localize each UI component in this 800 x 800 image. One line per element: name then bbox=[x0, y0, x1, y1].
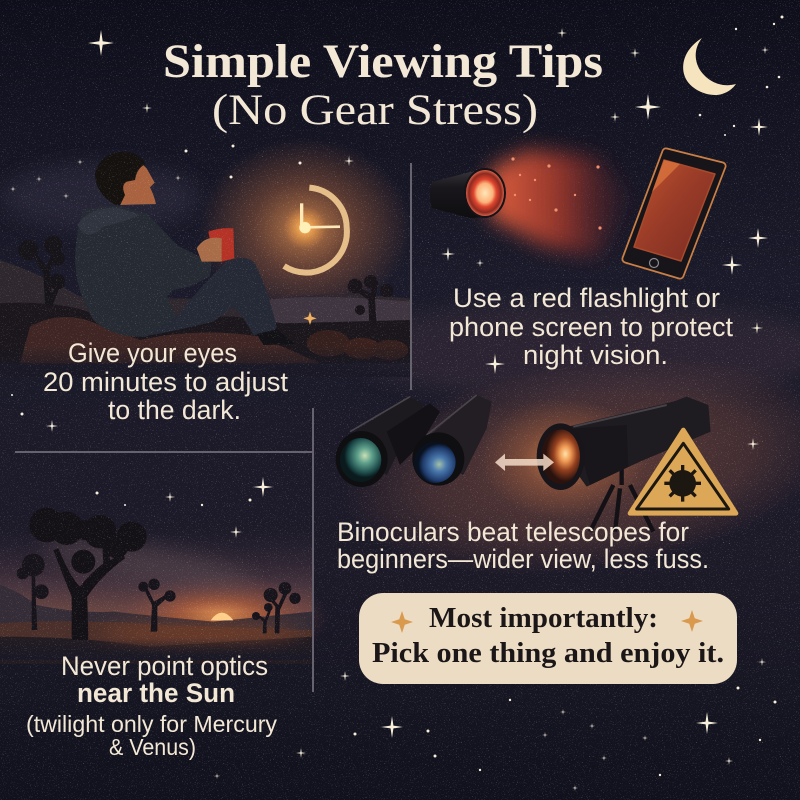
callout: Most importantly: bbox=[429, 603, 658, 634]
red beam bbox=[490, 150, 632, 257]
icon: tripod bbox=[590, 468, 653, 532]
icon: sun bbox=[211, 613, 233, 620]
caption bbox=[449, 283, 733, 370]
icon: sparkle left bbox=[391, 611, 413, 633]
caption: eyes: 20 minutes to adjust bbox=[43, 367, 288, 397]
caption bbox=[337, 517, 709, 574]
icon: joshua tree left bbox=[18, 236, 65, 305]
caption: Binoculars beat telescopes for bbox=[337, 517, 689, 547]
hand bbox=[197, 238, 222, 262]
icon: small trees right bbox=[252, 582, 301, 633]
panel: dark adaptation scene bbox=[0, 138, 412, 363]
icon: gold sparkle bbox=[303, 312, 317, 325]
title: (No Gear Stress) bbox=[212, 87, 538, 134]
icon: small tree left bbox=[17, 554, 49, 630]
caption: Use a red flashlight or bbox=[453, 283, 720, 313]
panel: optics bbox=[336, 395, 736, 574]
icon: crescent moon bbox=[683, 38, 736, 95]
icon: small tree centre bbox=[138, 579, 176, 632]
panel: sunset scene bbox=[0, 508, 330, 665]
icon: flashlight bbox=[430, 168, 506, 218]
icon: sparkle right bbox=[681, 610, 703, 632]
legs bbox=[143, 258, 277, 337]
panel: red light bbox=[430, 150, 733, 370]
caption: sun warning: & Venus) bbox=[109, 734, 196, 760]
icon: binoculars bbox=[336, 395, 492, 487]
icon: double arrow bbox=[495, 454, 554, 471]
divider lines bbox=[15, 163, 411, 692]
hair bbox=[95, 152, 145, 205]
icon: red mug bbox=[208, 228, 234, 262]
icon: large joshua tree bbox=[29, 508, 147, 640]
caption: sun warning: (twilight only for Mercury bbox=[26, 711, 277, 737]
icon: joshua tree right bbox=[348, 275, 393, 325]
telescope glow bbox=[480, 398, 647, 518]
title bbox=[163, 35, 603, 134]
person bbox=[75, 152, 295, 345]
caption: beginners—wider view, less fuss. bbox=[337, 544, 709, 574]
caption: night vision. bbox=[523, 340, 668, 370]
callout: Pick one thing and enjoy it. bbox=[372, 638, 724, 669]
hoodie bbox=[75, 206, 212, 337]
caption: eyes: to the dark. bbox=[108, 395, 241, 425]
caption: sun warning: near the Sun bbox=[77, 678, 235, 708]
icon: warning sign bbox=[630, 430, 736, 513]
icon: telescope bbox=[537, 397, 711, 490]
icon: clock glow bbox=[283, 188, 347, 273]
caption: eyes bbox=[43, 338, 288, 425]
caption: eyes: Give your eyes bbox=[68, 338, 237, 368]
beam sparkles bbox=[511, 157, 602, 230]
caption: sun warning: Never point optics bbox=[61, 651, 268, 681]
face bbox=[115, 162, 156, 205]
icon: phone bbox=[626, 152, 722, 275]
caption: phone screen to protect bbox=[449, 312, 733, 342]
title: Simple Viewing Tips bbox=[163, 35, 603, 88]
caption: sun warning bbox=[26, 651, 277, 760]
callout bbox=[359, 593, 737, 684]
rocks bbox=[20, 317, 408, 363]
